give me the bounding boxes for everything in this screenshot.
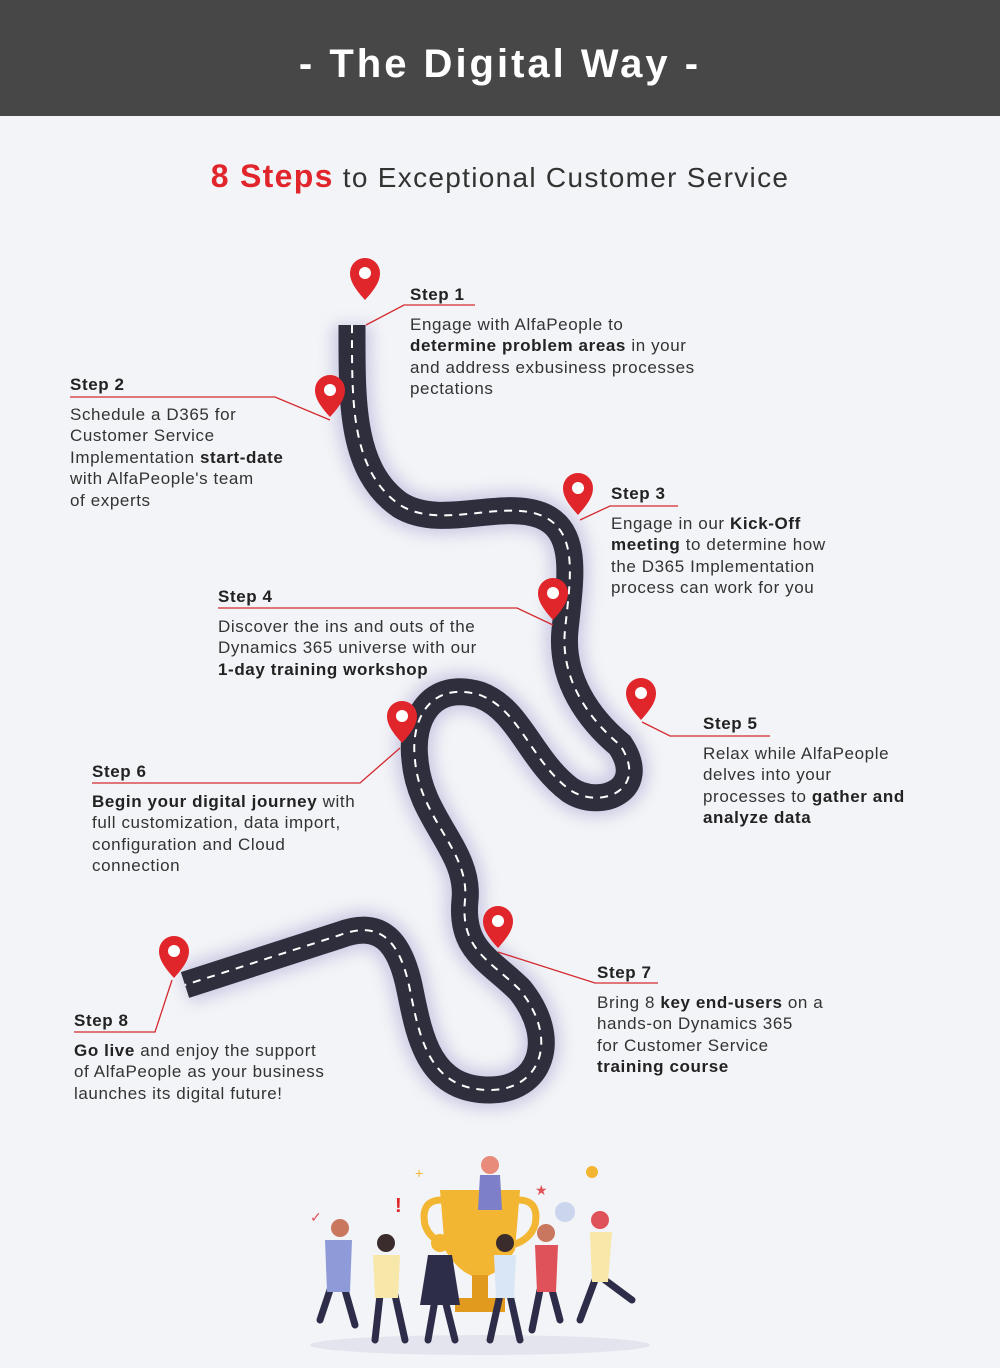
step 5: analyze data xyxy=(703,808,811,827)
step 3: process can work for you xyxy=(611,578,814,597)
step 2: Implementation start-date xyxy=(70,448,283,466)
step 3 xyxy=(611,484,826,597)
header: - The Digital Way - xyxy=(299,42,701,86)
step 5 xyxy=(703,714,905,827)
step 4: Dynamics 365 universe with our xyxy=(218,638,477,657)
step 4: 1-day training workshop xyxy=(218,660,428,678)
step 1: determine problem areas in your xyxy=(410,336,687,355)
step 1 xyxy=(410,285,695,398)
step 6: configuration and Cloud xyxy=(92,834,285,854)
step 7: hands-on Dynamics 365 xyxy=(597,1014,793,1033)
pins xyxy=(159,258,656,978)
illustration: trophy celebration: + xyxy=(415,1165,423,1181)
step 6 xyxy=(92,762,355,875)
step 8: of AlfaPeople as your business xyxy=(74,1062,324,1081)
step 2: Step 2 xyxy=(70,375,125,394)
step 3: Step 3 xyxy=(611,484,666,503)
step 4 xyxy=(218,587,477,678)
connector lines xyxy=(70,305,770,1032)
step 6: Begin your digital journey with xyxy=(92,792,355,810)
step 6: connection xyxy=(92,856,180,875)
road xyxy=(185,325,629,1090)
step 1: pectations xyxy=(410,379,494,398)
step 5: Relax while AlfaPeople xyxy=(703,744,889,762)
step 3: Engage in our Kick-Off xyxy=(611,514,801,532)
step 7: for Customer Service xyxy=(597,1036,769,1054)
step 2 xyxy=(70,375,283,510)
step 2: of experts xyxy=(70,490,151,510)
step 8 xyxy=(74,1011,324,1102)
step 7: training course xyxy=(597,1057,729,1076)
step 1: Step 1 xyxy=(410,285,465,304)
step 3: meeting to determine how xyxy=(611,535,826,554)
step 7: Step 7 xyxy=(597,963,652,982)
step 6: full customization, data import, xyxy=(92,813,341,832)
step 8: Step 8 xyxy=(74,1011,129,1030)
illustration: trophy celebration: ! xyxy=(395,1195,402,1217)
step 2: with AlfaPeople's team xyxy=(70,469,254,488)
illustration: trophy celebration: ✓ xyxy=(310,1209,322,1225)
step 7: Bring 8 key end-users on a xyxy=(597,992,823,1012)
step 1: Engage with AlfaPeople to xyxy=(410,314,623,334)
step 4: Step 4 xyxy=(218,587,273,606)
step 7 xyxy=(597,963,823,1076)
header xyxy=(0,0,1000,116)
step 5: delves into your xyxy=(703,765,832,784)
illustration: trophy celebration xyxy=(310,1156,650,1355)
step 2: Customer Service xyxy=(70,426,215,445)
step 5: processes to gather and xyxy=(703,786,905,806)
step 6: Step 6 xyxy=(92,762,147,781)
step 2: Schedule a D365 for xyxy=(70,404,236,424)
illustration: trophy celebration: ★ xyxy=(535,1182,548,1198)
subtitle: 8 Steps to Exceptional Customer Service xyxy=(211,158,789,194)
step 3: the D365 Implementation xyxy=(611,556,815,576)
step 8: Go live and enjoy the support xyxy=(74,1040,316,1060)
step 4: Discover the ins and outs of the xyxy=(218,616,475,636)
step 5: Step 5 xyxy=(703,714,758,733)
step 8: launches its digital future! xyxy=(74,1084,283,1102)
step 1: and address exbusiness processes xyxy=(410,358,695,376)
